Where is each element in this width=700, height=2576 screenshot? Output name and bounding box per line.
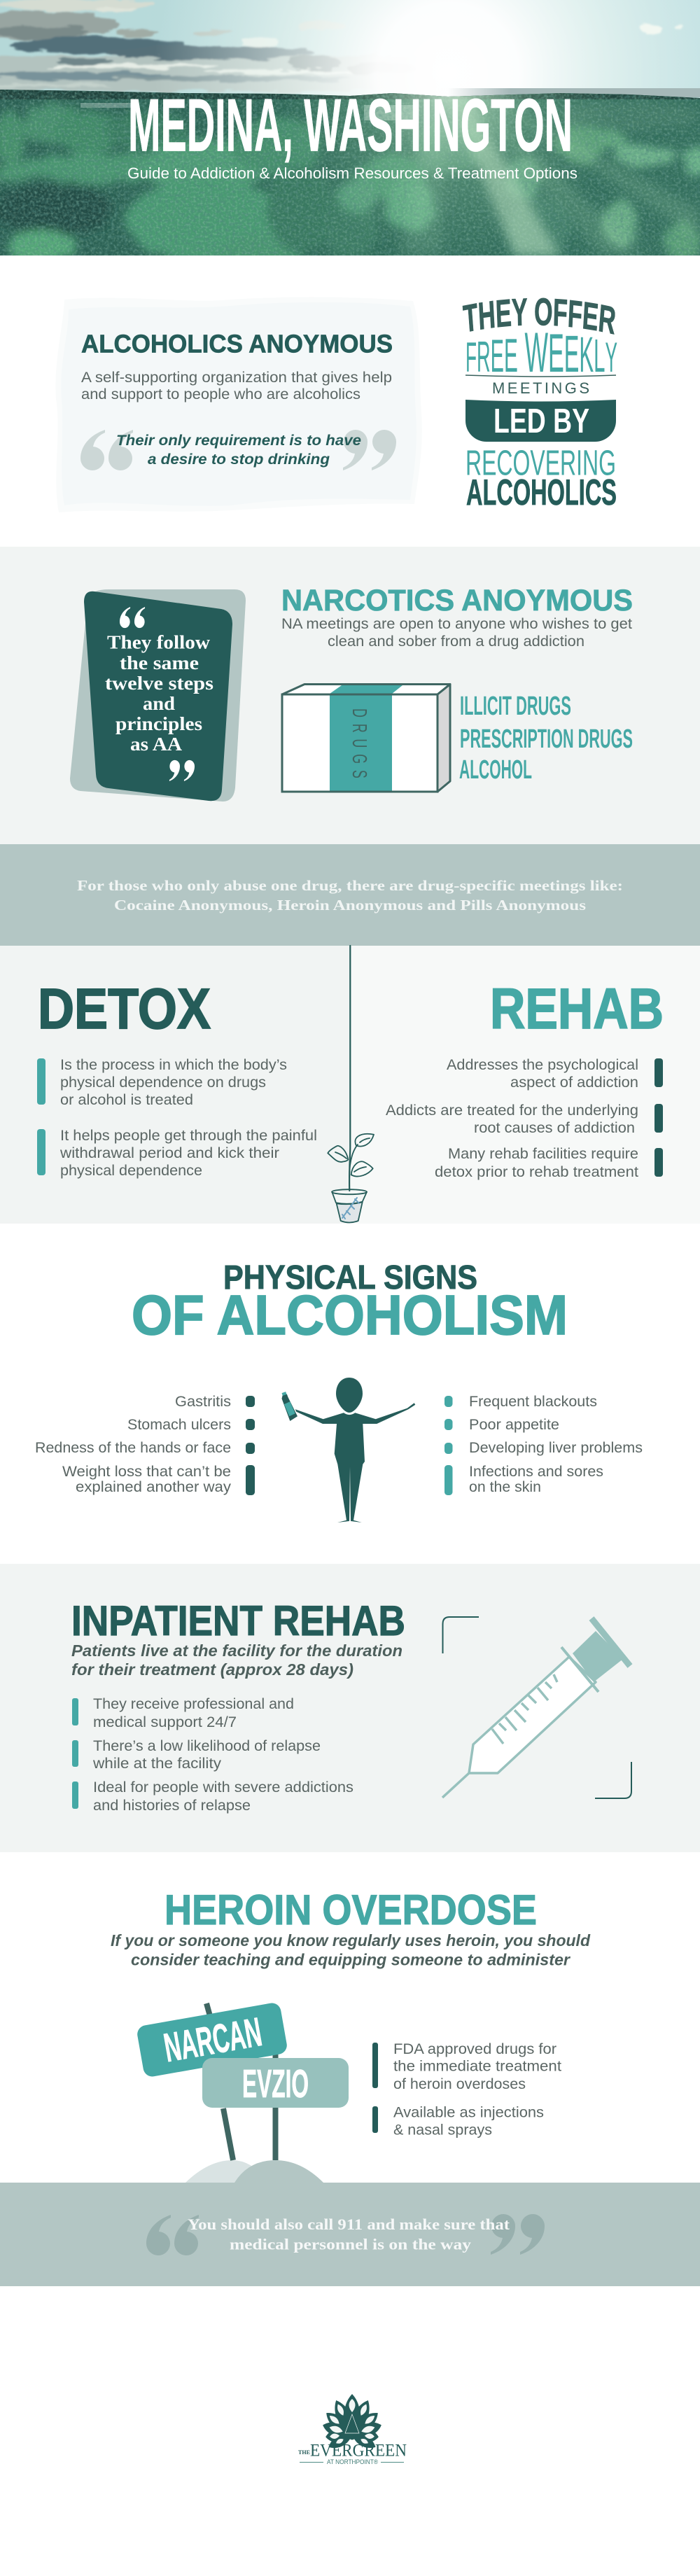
subtitle: Guide to Addiction & Alcoholism Resources & Treatment Options (127, 164, 578, 182)
subheading: Patients live at the facility for the duration (71, 1642, 402, 1660)
posts (206, 2003, 276, 2160)
bullet 1: They receive professional and (93, 1696, 294, 1712)
logo: the evergreen at northpoint (298, 2394, 407, 2466)
icon: plant in pot (328, 946, 374, 1222)
detox bullet 1: physical dependence on drugs (60, 1074, 266, 1091)
bullet 3: Ideal for people with severe addictions (93, 1779, 354, 1795)
detox heading: DETOX (38, 977, 211, 1041)
right signs: Frequent blackouts (469, 1394, 597, 1410)
bullet 1: medical support 24/7 (93, 1714, 237, 1730)
evzio sign: EVZIO (242, 2062, 309, 2106)
banner text (188, 2216, 510, 2253)
left signs: Stomach ulcers (127, 1417, 231, 1433)
banner: drug-specific meetings: Cocaine Anonymous, Heroin Anonymous and Pills Anonymous (114, 897, 586, 913)
left signs: Redness of the hands or face (35, 1440, 231, 1456)
panel: detox vs rehab (0, 946, 700, 1224)
heading: OF ALCOHOLISM (132, 1284, 568, 1346)
icon: person with bottle (281, 1378, 415, 1522)
wordmark: THE (298, 2449, 310, 2456)
card text: twelve steps (105, 673, 214, 694)
card text: and (143, 693, 175, 714)
rehab heading: REHAB (490, 977, 664, 1041)
heading: PHYSICAL SIGNS (223, 1259, 477, 1296)
box label: DRUGS (348, 708, 370, 778)
subheading: consider teaching and equipping someone to administer (131, 1950, 570, 1968)
heading (132, 1259, 568, 1346)
heading: INPATIENT REHAB (71, 1597, 405, 1644)
left signs: explained another way (76, 1479, 232, 1495)
banner: drug-specific meetings: For those who only abuse one drug, there are drug-specific meetings like: (77, 877, 623, 894)
bullet 1: FDA approved drugs for (393, 2041, 556, 2057)
subheading (111, 1931, 591, 1968)
rehab bullet 2 (386, 1102, 663, 1136)
rehab bullet 1: aspect of addiction (510, 1074, 638, 1091)
panel: physical signs of alcoholism (35, 1259, 643, 1522)
right signs: Poor appetite (469, 1417, 559, 1433)
left signs (35, 1394, 255, 1495)
quote text: a desire to stop drinking (148, 451, 330, 468)
icon: banner quote marks (146, 2214, 545, 2255)
description (81, 370, 392, 402)
description: A self-supporting organization that gives help (81, 370, 392, 386)
card text: principles (115, 713, 202, 734)
icon: drugs box (282, 685, 450, 792)
narcan sign (136, 2002, 288, 2078)
meetings: MEETINGS (492, 379, 589, 397)
quote card (70, 589, 246, 802)
heading: NARCOTICS ANOYMOUS (281, 584, 633, 617)
bullet 1: the immediate treatment (393, 2058, 561, 2075)
heading: ALCOHOLICS ANOYMOUS (81, 329, 393, 358)
icon: card quote marks (120, 607, 195, 781)
description: NA meetings are open to anyone who wishes to get (281, 616, 632, 632)
left signs: Gastritis (175, 1394, 231, 1410)
icon: syringe (442, 1617, 631, 1798)
subheading (71, 1642, 402, 1679)
detox bullet 2: physical dependence (60, 1163, 202, 1179)
tree outline (345, 2414, 359, 2433)
banner: call 911 (0, 2183, 700, 2286)
icon: bottle (281, 1392, 298, 1421)
heading: HEROIN OVERDOSE (164, 1886, 537, 1933)
description (281, 616, 632, 650)
bullet 1 (372, 2041, 561, 2092)
detox bullet 2 (37, 1128, 317, 1179)
right signs: on the skin (469, 1479, 541, 1495)
bullet 1: of heroin overdoses (393, 2076, 526, 2092)
subheading: If you or someone you know regularly uses heroin, you should (111, 1931, 591, 1949)
evzio sign (202, 2058, 349, 2108)
subheading: for their treatment (approx 28 days) (71, 1660, 354, 1679)
wordmark: AT NORTHPOINT® (327, 2458, 378, 2466)
hero photo: sky and clouds (0, 0, 700, 98)
card text: as AA (130, 734, 183, 755)
bullet 2 (372, 2104, 544, 2138)
hero photo: forest (0, 90, 700, 255)
arc rule (465, 375, 616, 377)
blob card (55, 297, 422, 512)
bullet 2: while at the facility (92, 1756, 222, 1772)
alcoholics: ALCOHOLICS (466, 472, 617, 513)
banner text: You should also call 911 and make sure that (188, 2216, 510, 2233)
detox bullet 2: withdrawal period and kick their (59, 1145, 279, 1161)
card text (105, 631, 214, 755)
path-guided heading: they offer (462, 298, 615, 335)
panel: alcoholics anonymous (55, 297, 422, 512)
icon: quote marks (80, 430, 396, 470)
panel: free weekly meetings lettering (462, 298, 617, 513)
bullet 2: There’s a low likelihood of relapse (93, 1738, 321, 1754)
banner: drug-specific meetings (0, 844, 700, 946)
icon: flower mark (321, 2394, 384, 2452)
detox bullet 1: or alcohol is treated (60, 1092, 193, 1108)
detox bullet 2: It helps people get through the painful (60, 1128, 317, 1144)
bullet 2: & nasal sprays (393, 2122, 492, 2138)
wordmark (298, 2442, 407, 2466)
banner: led by: LED BY (493, 402, 589, 440)
panel: inpatient rehab (0, 1564, 700, 1852)
description: clean and sober from a drug addiction (328, 634, 584, 650)
hills (186, 2160, 270, 2183)
rehab bullet 2: root causes of addiction (474, 1120, 635, 1136)
right signs: Developing liver problems (469, 1440, 643, 1456)
rehab bullet 3: detox prior to rehab treatment (435, 1164, 638, 1180)
description: and support to people who are alcoholics (81, 386, 360, 402)
banner text: medical personnel is on the way (230, 2236, 471, 2253)
list of substances: ILLICIT DRUGS (460, 692, 571, 721)
rehab bullet 3: Many rehab facilities require (448, 1146, 638, 1162)
left signs: Weight loss that can’t be (62, 1464, 231, 1480)
right signs: Infections and sores (469, 1464, 603, 1480)
rehab bullet 3 (435, 1146, 663, 1180)
bullet 3 (72, 1779, 354, 1814)
rehab bullet 2: Addicts are treated for the underlying (386, 1102, 638, 1119)
panel: heroin overdose (111, 1886, 591, 2183)
list of substances (459, 692, 633, 785)
frame corners (442, 1617, 479, 1653)
recovering: RECOVERING (465, 442, 616, 483)
list of substances: ALCOHOL (459, 755, 532, 785)
wordmark: EVERGREEN (310, 2442, 407, 2460)
quote text (116, 433, 361, 468)
free weekly: FREE WEEKLY (465, 321, 617, 384)
detox bullet 1: Is the process in which the body’s (60, 1057, 287, 1073)
path-guided heading: they offer: THEY OFFER (462, 298, 615, 335)
hero panel (0, 0, 700, 276)
bullet 2 (72, 1738, 321, 1772)
rehab bullet 1: Addresses the psychological (447, 1057, 638, 1073)
bullet 2: Available as injections (393, 2104, 544, 2121)
rehab bullet 1 (447, 1057, 663, 1091)
panel: narcotics anonymous (0, 547, 700, 844)
bullet 1 (72, 1696, 294, 1730)
quote text: Their only requirement is to have (116, 433, 361, 449)
right signs (444, 1394, 643, 1495)
icon: signposts (136, 2002, 349, 2183)
bullet 3: and histories of relapse (93, 1798, 251, 1814)
card text: the same (120, 652, 199, 673)
narcan sign: NARCAN (160, 2009, 265, 2071)
detox bullet 1 (37, 1057, 287, 1108)
card text: They follow (107, 631, 211, 652)
